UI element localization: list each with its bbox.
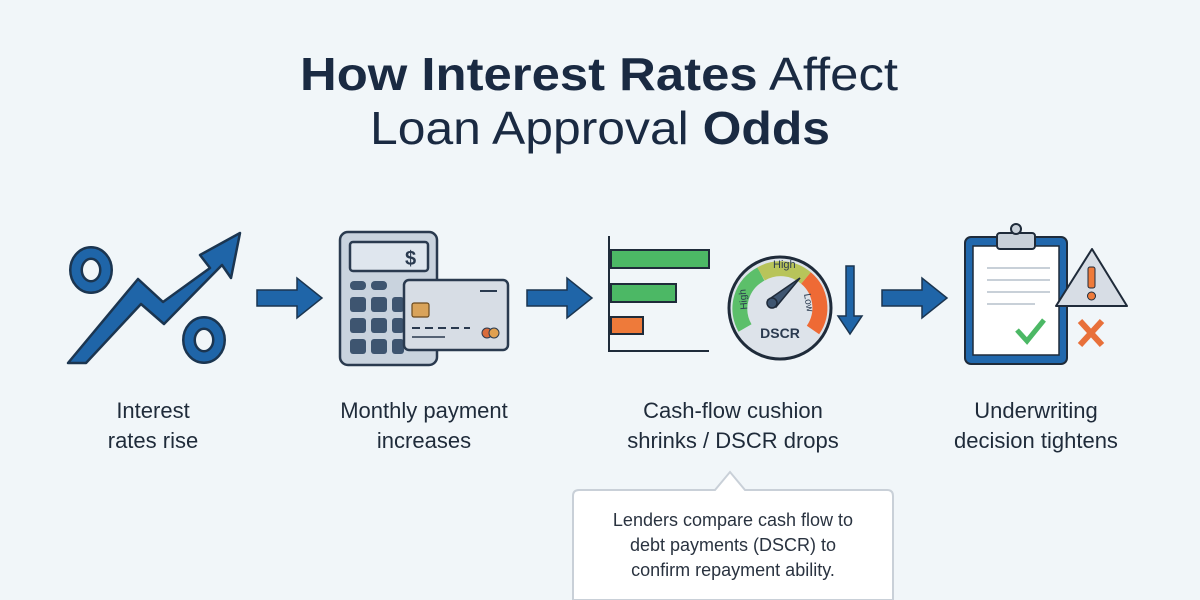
title: How Interest Rates Affect <box>300 48 898 100</box>
callout: confirm repayment ability. <box>631 560 835 580</box>
icon: DSCR gauge <box>729 257 831 359</box>
label: monthly payment increases: increases <box>377 428 471 453</box>
label: underwriting: decision tightens <box>954 428 1118 453</box>
icon: DSCR gauge: DSCR <box>760 325 800 341</box>
callout: debt payments (DSCR) to <box>630 535 836 555</box>
label: cash-flow cushion: Cash-flow cushion <box>643 398 823 423</box>
icon: calculator and card <box>340 232 508 365</box>
arrow 2 <box>527 278 592 318</box>
icon: down arrow <box>838 266 862 334</box>
callout: Lenders compare cash flow to <box>613 510 853 530</box>
arrow 1 <box>257 278 322 318</box>
arrow 3 <box>882 278 947 318</box>
label: monthly payment increases: Monthly payment <box>340 398 508 423</box>
icon: percent with rising arrow <box>68 233 240 363</box>
icon: bar chart <box>609 236 709 351</box>
icon: clipboard with warning <box>965 224 1127 364</box>
title: Loan Approval Odds <box>370 102 830 154</box>
icon: calculator and card: $ <box>405 248 416 270</box>
title <box>300 48 898 154</box>
icon: DSCR gauge: Low <box>801 293 815 313</box>
label: interest rates rise: Interest <box>116 398 190 423</box>
label: interest rates rise: rates rise <box>108 428 198 453</box>
callout <box>573 472 893 600</box>
label: cash-flow cushion: shrinks / DSCR drops <box>627 428 839 453</box>
icon: DSCR gauge: High <box>773 259 796 271</box>
label: underwriting: Underwriting <box>974 398 1098 423</box>
icon: DSCR gauge: High <box>738 289 750 310</box>
